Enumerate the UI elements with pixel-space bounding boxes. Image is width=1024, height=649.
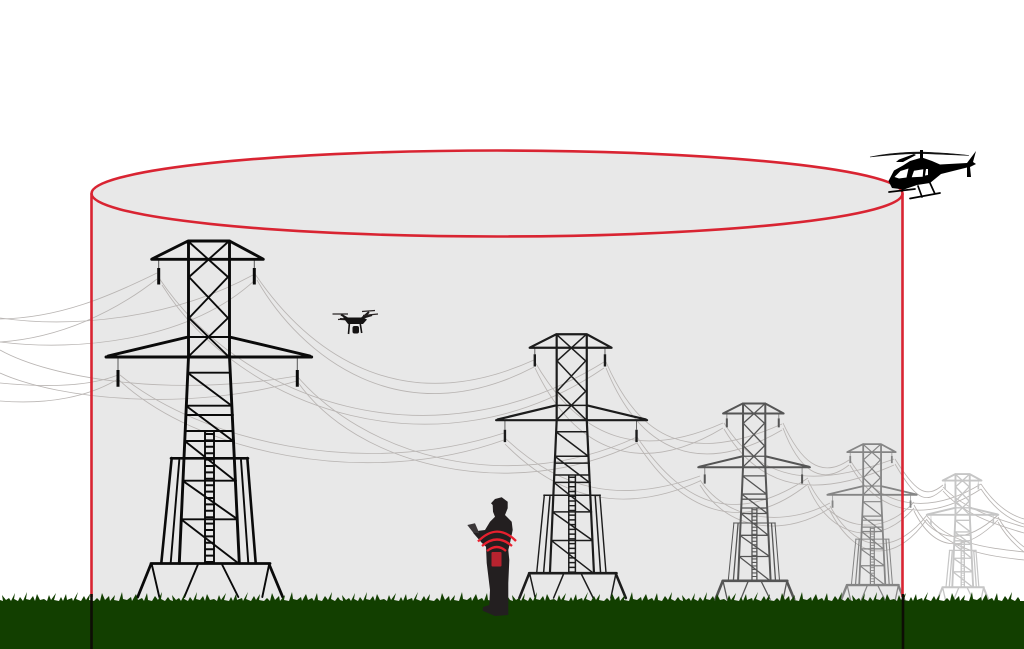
red controller [492, 552, 502, 566]
windows [894, 168, 908, 178]
tower 2 [496, 334, 647, 598]
cylinder volume fill [92, 150, 902, 602]
fuselage [888, 151, 976, 190]
power lines [0, 273, 1024, 560]
cylinder left edge below ground [90, 594, 93, 649]
person silhouette [473, 497, 513, 616]
tower 4 [827, 444, 917, 600]
grass ground [0, 592, 1024, 649]
signal waves [478, 532, 516, 551]
tower 1 (nearest) [106, 241, 312, 597]
person with controller [467, 497, 516, 616]
helicopter [870, 150, 976, 198]
cylinder left edge [90, 194, 93, 597]
drone [332, 310, 378, 334]
tablet [467, 523, 479, 533]
tower 5 (farthest) [927, 474, 998, 599]
cylinder right edge below ground [902, 594, 904, 649]
rotor [870, 152, 969, 157]
tower 3 [698, 403, 810, 599]
skids [889, 183, 940, 198]
cylinder right edge [901, 194, 904, 597]
cylinder top ellipse outline [92, 150, 902, 236]
